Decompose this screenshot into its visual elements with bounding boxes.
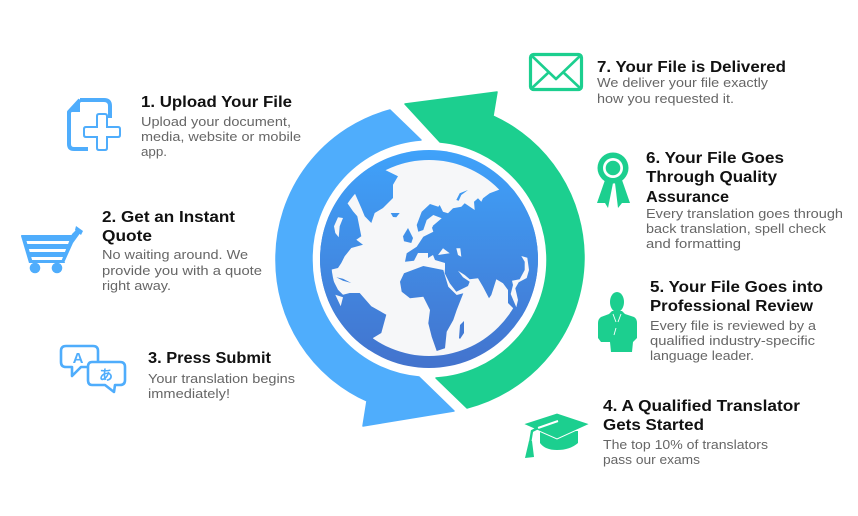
description: Every translation goes through [646,206,843,221]
description [141,114,301,159]
description: back translation, spell check [646,221,827,236]
description: The top 10% of translators [603,437,769,452]
heading: 2. Get an Instant [102,209,236,226]
description: qualified industry-specific [650,333,816,348]
description: right away. [102,278,171,293]
icon: shopping cart [21,226,83,273]
description: Your translation begins [148,371,296,386]
step 7: your file is delivered [530,54,786,106]
description: pass our exams [603,452,701,467]
heading: Gets Started [603,417,704,434]
icon: graduation cap [523,413,590,458]
description: app. [141,144,167,159]
description: immediately! [148,386,230,401]
description [148,371,296,401]
heading: Quote [102,228,152,245]
description [650,318,817,363]
heading: Assurance [646,189,729,206]
step 5: professional review [598,279,823,363]
heading: 5. Your File Goes into [650,279,823,296]
green cycle arrow [405,92,584,408]
heading: 1. Upload Your File [141,94,292,111]
heading: 7. Your File is Delivered [597,59,786,76]
icon: translation speech bubbles: あ [99,367,113,383]
step 1: upload your file [68,94,301,159]
description [646,206,843,251]
icon: award ribbon [597,152,630,208]
step 3: press submit [61,346,296,401]
heading: 4. A Qualified Translator [603,398,800,415]
description: We deliver your file exactly [597,75,769,90]
icon: envelope [530,54,582,90]
step 2: get an instant quote [21,209,262,293]
icon: translation speech bubbles [61,346,125,392]
heading [646,150,784,206]
globe [320,150,538,368]
heading [102,209,236,245]
description [603,437,769,467]
heading: Through Quality [646,169,777,186]
description: language leader. [650,348,754,363]
icon: translation speech bubbles: A [73,350,84,367]
description: Every file is reviewed by a [650,318,817,333]
description: how you requested it. [597,91,734,106]
heading [650,279,823,315]
description: Upload your document, [141,114,291,129]
description [102,247,262,293]
description: No waiting around. We [102,247,248,262]
heading: Professional Review [650,298,814,315]
blue cycle arrow [276,110,454,426]
description: and formatting [646,236,741,251]
description [597,75,769,106]
step 4: a qualified translator gets started [523,398,800,467]
heading: 6. Your File Goes [646,150,784,167]
heading [603,398,800,434]
heading: 3. Press Submit [148,350,272,367]
icon: document with plus [68,99,120,150]
description: provide you with a quote [102,263,262,278]
description: media, website or mobile [141,129,301,144]
icon: businessman [598,292,637,352]
step 6: quality assurance [597,150,843,251]
